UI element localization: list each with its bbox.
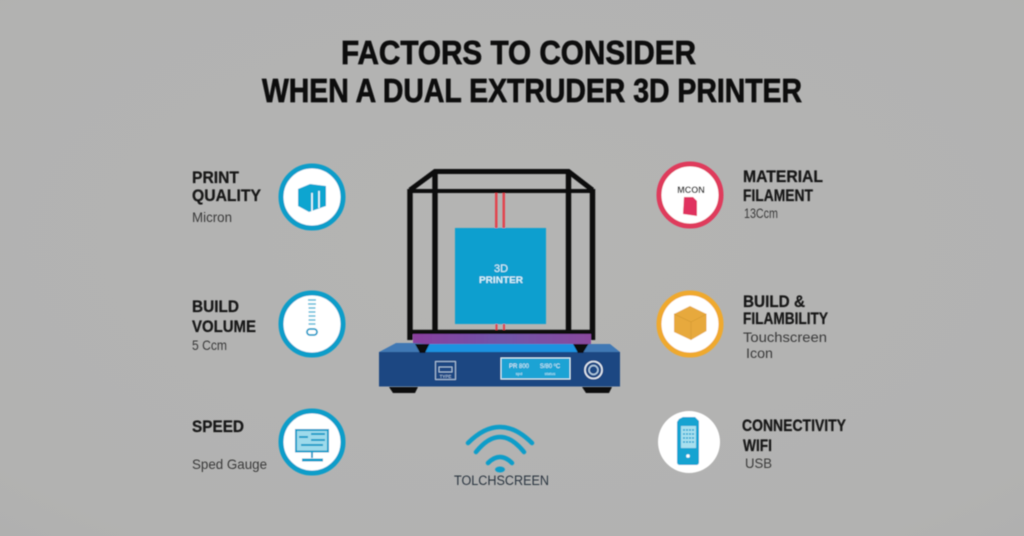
printer base: [379, 343, 620, 393]
icon: usb device: [658, 411, 720, 473]
icon: material filament: MCON: [677, 185, 705, 195]
blue print panel: [455, 228, 546, 324]
factor: print quality: QUALITY: [192, 187, 261, 205]
factor: print quality: PRINT: [192, 169, 239, 187]
factor: build and flammability: [659, 293, 828, 361]
factor: material filament: FILAMENT: [743, 187, 813, 205]
factor: material filament: 13Ccm: [744, 205, 778, 221]
purple rail: [413, 334, 591, 344]
factor: connectivity: WIFI: [743, 437, 772, 455]
printer control icon: [436, 362, 456, 380]
factor: connectivity: CONNECTIVITY: [742, 417, 846, 435]
factor: connectivity: USB: [745, 455, 772, 471]
title: FACTORS TO CONSIDER: [341, 34, 696, 71]
icon: print quality cube: [281, 166, 343, 228]
icon: speed monitor: [281, 411, 343, 473]
factor: speed: [192, 411, 343, 473]
icon: material filament: [659, 164, 721, 226]
printer control icon: TYPE: [440, 374, 451, 379]
printer display: S/80 ºC: [540, 363, 561, 370]
factor: print quality: [192, 166, 343, 228]
factor: build volume: 5 Ccm: [192, 337, 227, 353]
printer display: spd: [516, 371, 522, 376]
blue print panel: PRINTER: [479, 275, 523, 286]
icon: build volume gauge: [281, 293, 343, 355]
factor: speed: SPEED: [192, 418, 244, 436]
factor: build and flammability: Icon: [746, 345, 773, 361]
extruder rods: [495, 193, 505, 330]
icon: box: [659, 293, 721, 355]
factor: build and flammability: FILAMBILITY: [743, 310, 828, 328]
wifi touchscreen icon: [454, 427, 549, 488]
printer frame: [410, 171, 592, 340]
printer display: status: [545, 371, 555, 376]
factor: build and flammability: Touchscreen: [743, 329, 827, 345]
wifi touchscreen icon: TOLCHSCREEN: [454, 473, 549, 488]
factor: speed: Sped Gauge: [192, 456, 267, 472]
printer dial: [585, 362, 602, 378]
printer display: [501, 358, 570, 379]
factor: material filament: [659, 164, 823, 226]
3D printer illustration: [379, 171, 620, 393]
printer display: PR 800: [509, 364, 530, 370]
title: [262, 34, 802, 109]
factor: connectivity: [658, 411, 846, 473]
factor: build volume: VOLUME: [192, 318, 256, 336]
factor: build volume: [192, 293, 343, 355]
title: WHEN A DUAL EXTRUDER 3D PRINTER: [262, 72, 802, 109]
factor: build volume: BUILD: [192, 298, 239, 316]
factor: build and flammability: BUILD &: [743, 293, 805, 311]
factor: print quality: Micron: [192, 209, 232, 225]
factor: material filament: MATERIAL: [743, 168, 823, 186]
blue print panel: 3D: [494, 263, 508, 275]
